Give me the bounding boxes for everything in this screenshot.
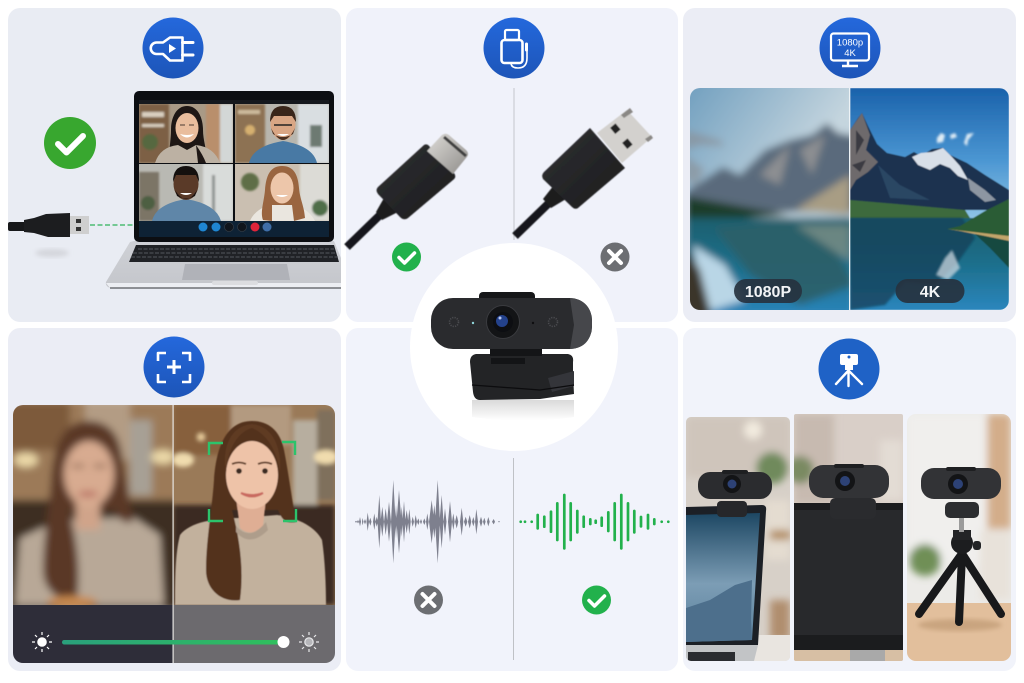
- icon: plug with play symbol: [142, 18, 204, 78]
- video tile: woman with glasses: [139, 104, 233, 163]
- 4k landscape half: [850, 88, 1009, 310]
- brightness slider: [62, 636, 290, 648]
- icon: dim sun: [32, 632, 52, 652]
- label: 4K: [896, 279, 964, 303]
- video call toolbar: [139, 221, 329, 237]
- landscape comparison photo: [690, 88, 1009, 310]
- panel: plug and play: [8, 8, 350, 322]
- panel: 1080p vs 4k: [680, 8, 1016, 322]
- blurred portrait half: [13, 405, 172, 605]
- divider: [513, 88, 515, 240]
- video tile: man with glasses: [235, 104, 329, 163]
- label: 4K: 4K: [920, 284, 941, 301]
- product: webcam in white circle: [410, 243, 618, 451]
- usb-c connector: [347, 134, 468, 247]
- panel: autofocus and light correction: [5, 328, 341, 671]
- video tile: man in blue shirt: [139, 164, 233, 221]
- icon: noisy cross: [414, 586, 443, 614]
- panel: mounting options: [683, 328, 1016, 671]
- reflection: [472, 400, 574, 420]
- divider: [512, 458, 514, 660]
- mount photo: tripod: [907, 414, 1011, 661]
- mount photo: monitor: [786, 414, 903, 661]
- mount photo: laptop: [686, 417, 790, 665]
- waveform: noisy: [355, 480, 500, 563]
- icon: tripod webcam: [818, 338, 880, 400]
- usb cable plugging in: [8, 213, 137, 257]
- webcam on monitor: [809, 464, 889, 510]
- icon: usb cable: [484, 18, 544, 78]
- icon: focus brackets: [144, 336, 204, 398]
- label: 1080P: [734, 279, 802, 303]
- comparison divider: [849, 88, 850, 310]
- laptop with video call: [106, 91, 350, 288]
- icon: usb-c check: [392, 242, 421, 272]
- icon: 1080p 4k monitor: [820, 18, 880, 78]
- brightness control bar: [13, 605, 335, 663]
- panel: noise-cancelling audio: [346, 328, 678, 671]
- laptop screen bezel: [134, 91, 334, 242]
- label: 1080P: 1080P: [745, 284, 791, 301]
- laptop base: [106, 241, 350, 288]
- portrait comparison photo: [5, 400, 338, 663]
- icon: 1080p 4k monitor: 4K: [844, 48, 856, 59]
- camera lens: [486, 306, 520, 338]
- webcam on tripod: [919, 467, 1001, 622]
- video tile: woman with auburn hair: [235, 164, 329, 221]
- clip stand: [470, 347, 574, 400]
- icon: green check: [44, 117, 96, 169]
- icon: clean check: [582, 586, 611, 614]
- waveform: clean: [521, 495, 668, 548]
- icon: 1080p 4k monitor: 1080p: [837, 38, 863, 48]
- icon: bright sun: [299, 632, 319, 652]
- face detection frame: [209, 442, 296, 521]
- 1080p blurred landscape half: [690, 88, 849, 310]
- icon: usb-a cross: [600, 242, 630, 272]
- panel: usb-c vs usb-a cable: [346, 8, 678, 322]
- webcam on laptop: [698, 470, 772, 517]
- usb-a connector: [515, 108, 653, 236]
- divider: [172, 405, 174, 663]
- sharp portrait half: [172, 405, 338, 605]
- camera body: [431, 292, 592, 349]
